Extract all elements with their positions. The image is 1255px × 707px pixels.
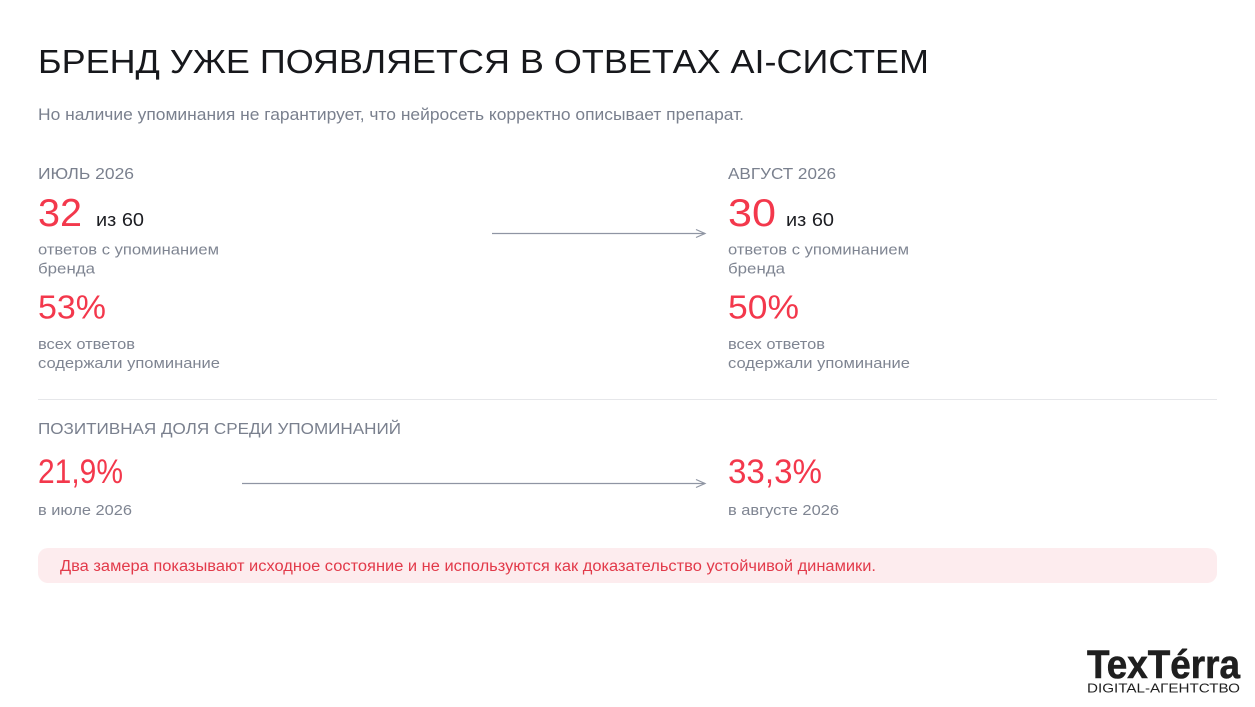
metric caption: August share: содержали упоминание [728, 355, 910, 372]
panel: July 2026 [38, 166, 220, 372]
metric caption: August share [728, 336, 910, 372]
caption: July: в июле 2026 [38, 502, 132, 519]
metric: 30 of 60: 30 [728, 192, 776, 235]
metric caption: July share: содержали упоминание [38, 355, 220, 372]
callout: Два замера показывают исходное состояние и не используются как доказательство устойчивой динамики. [60, 558, 876, 575]
metric caption: August share: всех ответов [728, 336, 825, 353]
metric: 30 of 60 [728, 192, 834, 235]
subtitle: Но наличие упоминания не гарантирует, что нейросеть корректно описывает препарат. [38, 106, 744, 124]
callout [38, 548, 1217, 583]
arrow: July to August [492, 230, 705, 238]
metric: 50%: 50% [728, 290, 799, 326]
metric: 33.3%: 33,3% [728, 453, 822, 491]
metric caption: August mentions: бренда [728, 260, 786, 278]
metric caption: July mentions: ответов с упоминанием [38, 242, 219, 258]
metric caption: July share: всех ответов [38, 336, 135, 353]
logo: TexTerra: DIGITAL-АГЕНТСТВО [1087, 682, 1240, 696]
panel: positive share [38, 419, 839, 519]
period label: July: ИЮЛЬ 2026 [38, 166, 134, 183]
panel: August 2026 [728, 166, 910, 372]
metric: 30 of 60: из 60 [786, 210, 834, 230]
metric caption: August mentions [728, 242, 909, 278]
metric: 53%: 53% [38, 290, 106, 326]
metric: 32 of 60: из 60 [96, 210, 144, 230]
title: БРЕНД УЖЕ ПОЯВЛЯЕТСЯ В ОТВЕТАХ AI-СИСТЕМ [38, 43, 929, 80]
metric caption: July share [38, 336, 220, 372]
metric: 32 of 60 [38, 192, 144, 235]
metric caption: July mentions [38, 242, 219, 278]
section heading: ПОЗИТИВНАЯ ДОЛЯ СРЕДИ УПОМИНАНИЙ [38, 419, 401, 438]
logo: TexTerra: TexTérra [1087, 643, 1241, 687]
metric: 21.9%: 21,9% [38, 453, 123, 491]
caption: August: в августе 2026 [728, 502, 839, 519]
metric: 32 of 60: 32 [38, 192, 82, 235]
arrow: positive share [242, 480, 705, 488]
period label: August: АВГУСТ 2026 [728, 166, 836, 183]
metric caption: August mentions: ответов с упоминанием [728, 242, 909, 258]
metric caption: July mentions: бренда [38, 260, 96, 278]
